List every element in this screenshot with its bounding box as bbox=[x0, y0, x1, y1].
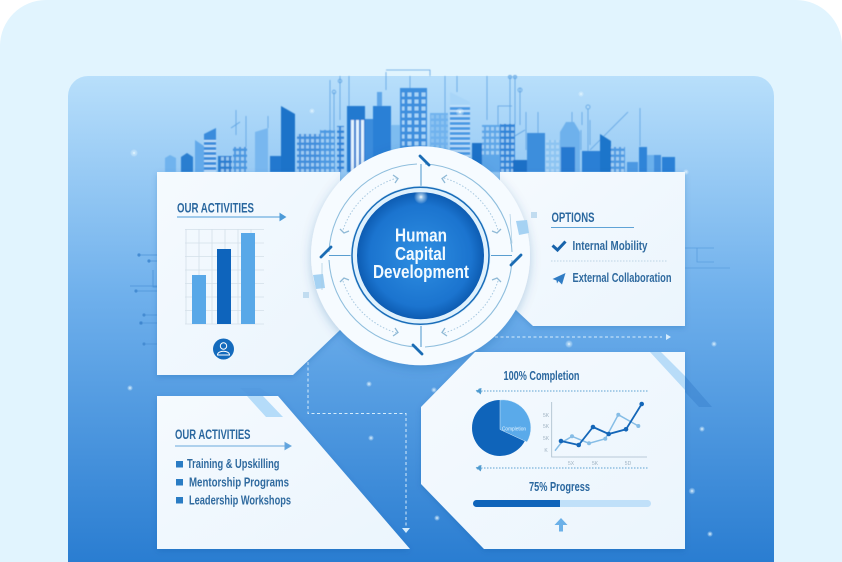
hub decorative squares bbox=[303, 212, 537, 298]
panel: bottom right progress bbox=[421, 352, 685, 549]
activity list: Training & Upskilling bbox=[187, 457, 280, 471]
activity list: Leadership Workshops bbox=[189, 494, 291, 508]
line chart: 5K bbox=[543, 436, 550, 442]
hub ring segments bbox=[329, 164, 512, 347]
central hub bbox=[303, 146, 537, 365]
pie chart: Completion bbox=[502, 426, 526, 432]
heading: progress: 75% Progress bbox=[529, 479, 590, 494]
hub blue disc bbox=[350, 186, 490, 326]
hub title: Capital bbox=[395, 244, 446, 264]
hub title: Human bbox=[395, 226, 447, 246]
dashed arrow bottom bbox=[476, 465, 649, 471]
progress bar bbox=[473, 500, 651, 507]
line chart: 5X bbox=[568, 461, 575, 467]
heading arrow bbox=[177, 214, 286, 220]
panel: options bbox=[500, 172, 685, 326]
line chart bbox=[543, 402, 647, 467]
activity list bbox=[176, 457, 291, 508]
line chart: 5K bbox=[543, 424, 550, 430]
icon: paper plane bbox=[552, 273, 566, 284]
line chart: 5K bbox=[592, 461, 599, 467]
pie chart bbox=[472, 400, 531, 456]
dashed arrow top bbox=[476, 388, 649, 394]
ribbon accent bbox=[650, 352, 685, 390]
dashed connector to bottom bbox=[308, 337, 662, 528]
heading: our activities: OUR ACTIVITIES bbox=[177, 200, 254, 216]
option: external collaboration: External Collaboration bbox=[572, 271, 672, 285]
hub ticks bbox=[321, 156, 521, 354]
heading: options: OPTIONS bbox=[552, 210, 594, 225]
panel: top left activities bbox=[157, 172, 340, 375]
main blue panel bbox=[68, 76, 774, 562]
line chart: 5D bbox=[625, 461, 632, 467]
hub dotted arcs bbox=[343, 178, 498, 333]
icon: person bbox=[213, 338, 234, 360]
icon: check bbox=[552, 242, 566, 250]
hub title: Development bbox=[373, 262, 469, 282]
ribbon shadow bottom right bbox=[685, 376, 712, 407]
hub title bbox=[373, 226, 469, 282]
skyline bbox=[165, 70, 675, 172]
line chart: 5K bbox=[543, 413, 550, 419]
option: internal mobility: Internal Mobility bbox=[572, 239, 648, 253]
heading: our activities: OUR ACTIVITIES bbox=[175, 427, 250, 442]
line chart: K bbox=[544, 448, 548, 454]
icon: up arrow bbox=[554, 518, 568, 532]
sparkle lights bbox=[127, 91, 717, 537]
connector arrow heads bbox=[402, 334, 671, 533]
ribbon accent bbox=[247, 396, 283, 417]
left circuit lines bbox=[130, 254, 157, 345]
panel: bottom left activities bbox=[157, 388, 410, 549]
activity list: Mentorship Programs bbox=[189, 476, 289, 490]
bar chart bbox=[185, 229, 264, 324]
heading arrow bbox=[175, 442, 291, 450]
hub chevrons bbox=[340, 175, 501, 336]
heading: completion: 100% Completion bbox=[504, 368, 580, 383]
right circuit lines bbox=[685, 248, 730, 268]
